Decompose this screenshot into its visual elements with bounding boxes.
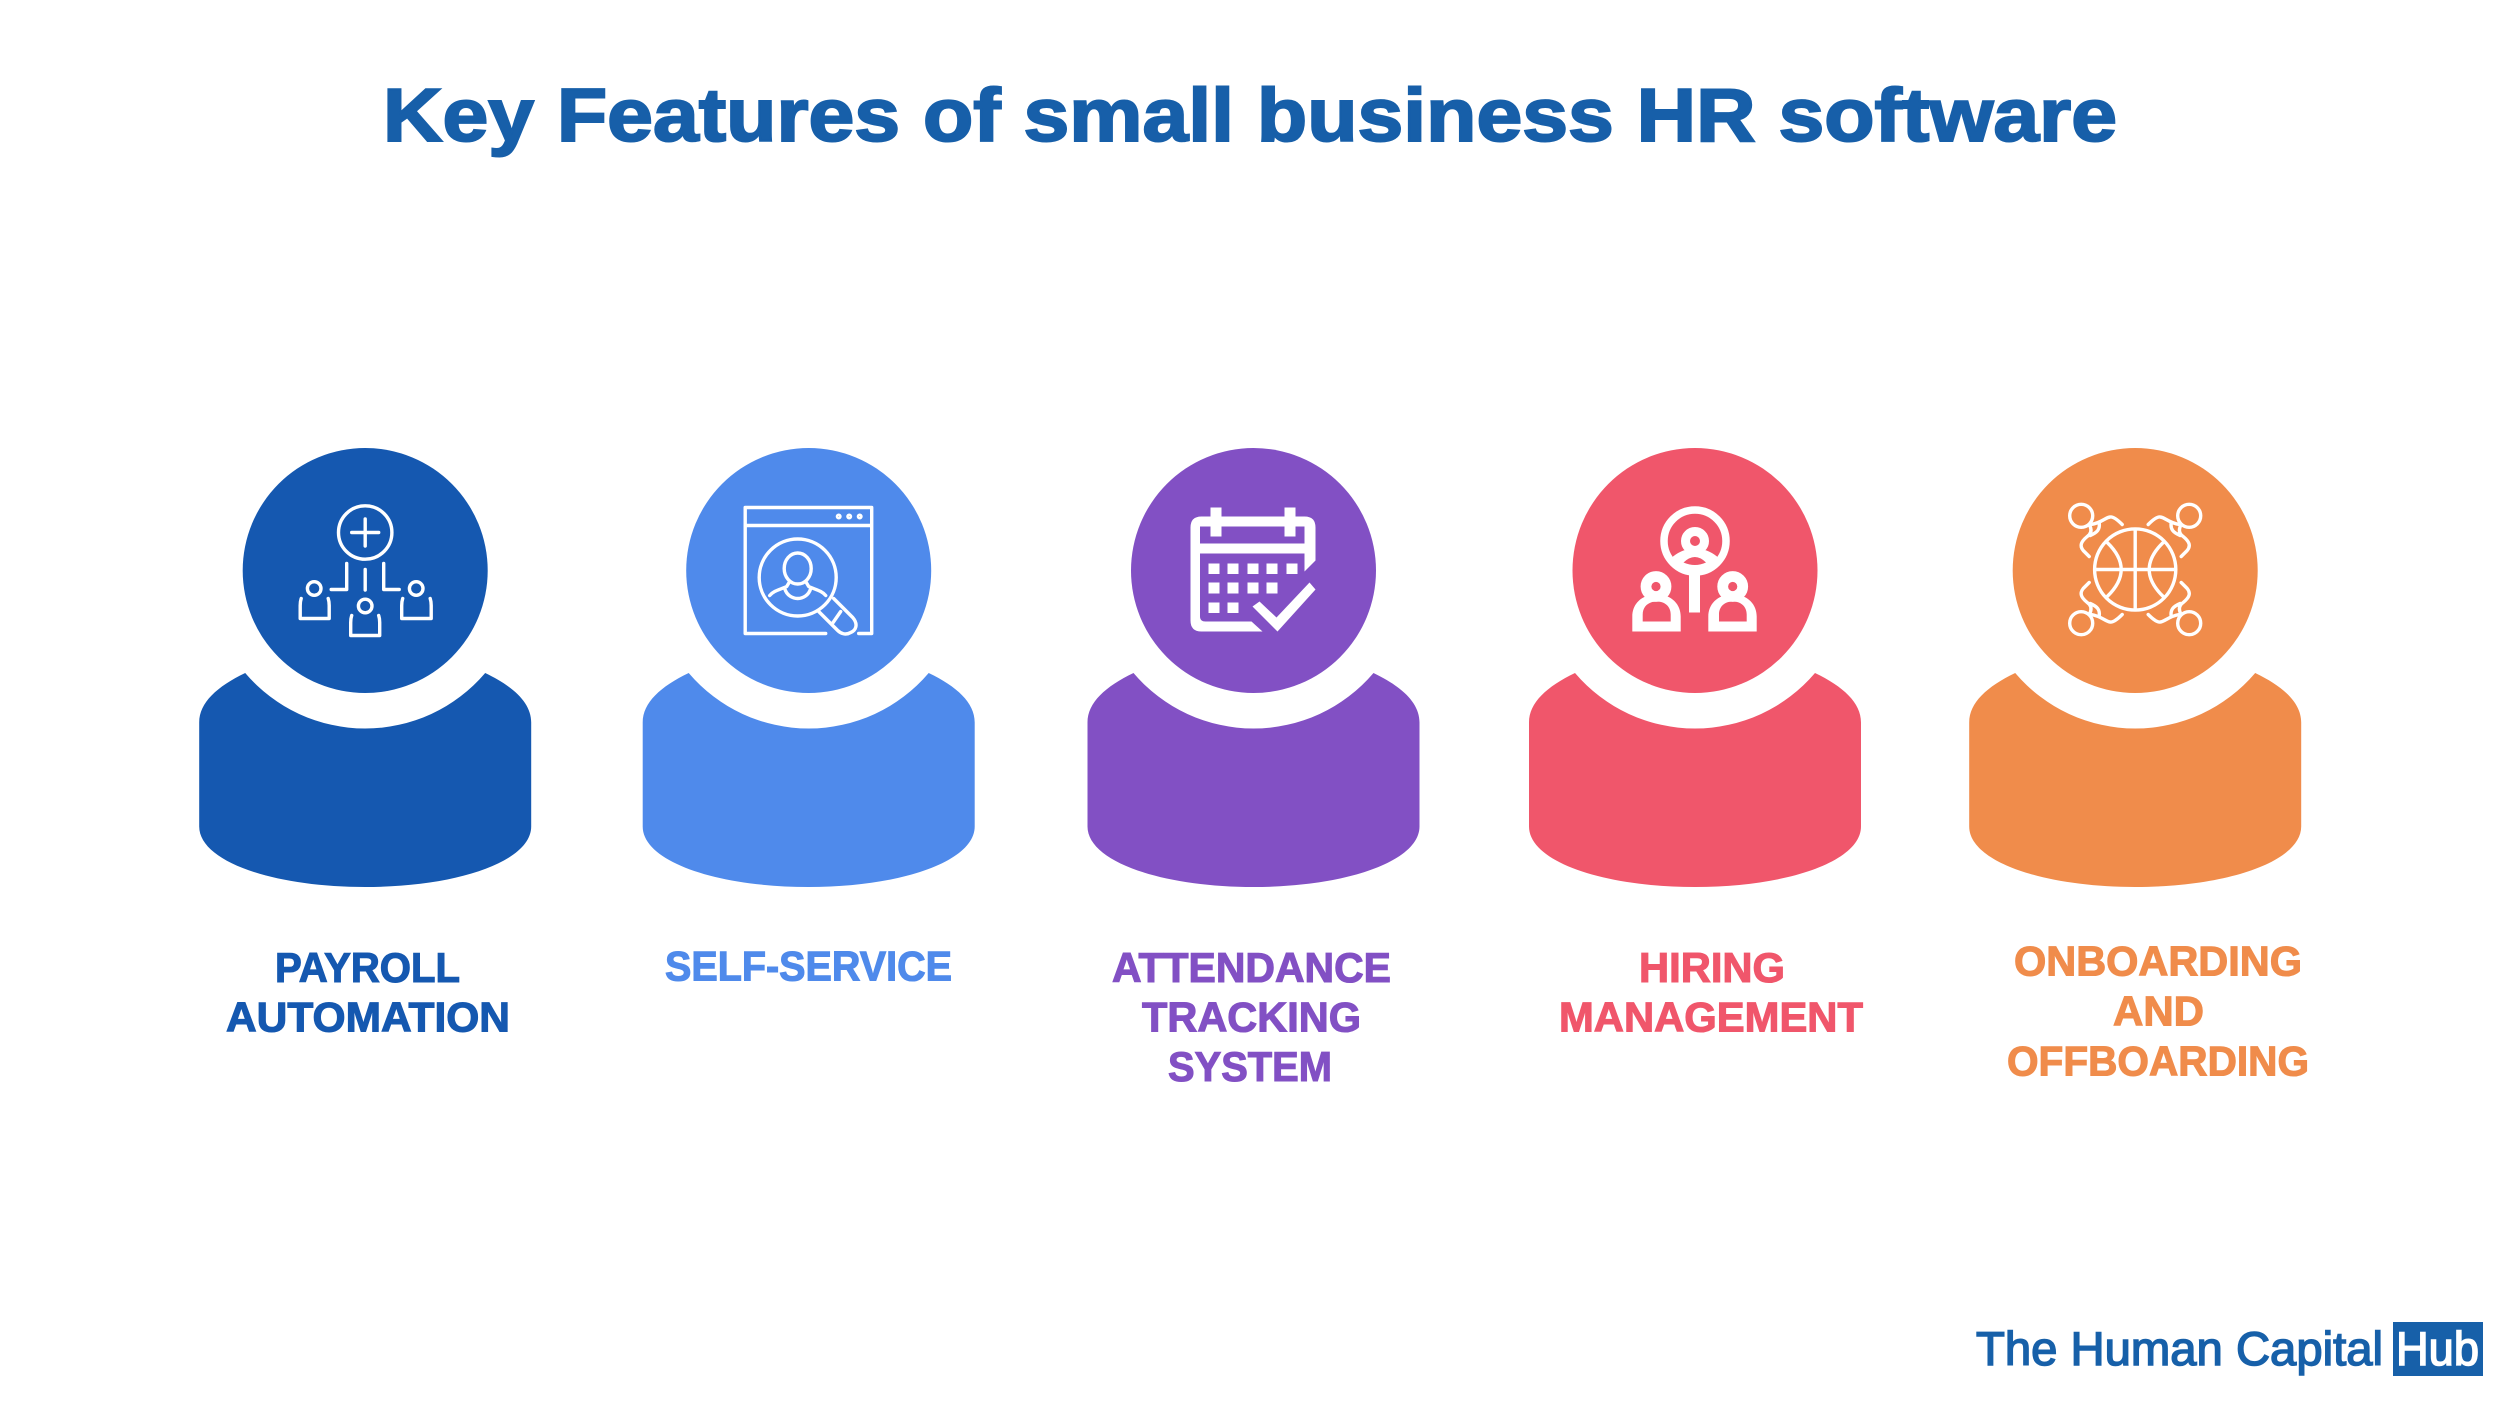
icon: org chart with plus	[300, 506, 431, 636]
label: payroll automation: PAYROLL	[275, 944, 460, 991]
label: attendance tracking system	[1112, 944, 1391, 1090]
label: attendance tracking system: ATTENDANCE	[1112, 944, 1391, 991]
label: attendance tracking system: SYSTEM	[1168, 1043, 1332, 1090]
body: payroll	[199, 673, 531, 887]
label: hiring management: MANAGEMENT	[1559, 994, 1863, 1040]
head circle: self-service	[686, 448, 931, 693]
head circle: payroll	[243, 448, 488, 693]
logo badge text: Hub	[2396, 1322, 2479, 1375]
body: attendance	[1088, 673, 1420, 887]
label: self-service: SELF-SERVICE	[665, 942, 952, 990]
label: payroll automation: AUTOMATION	[226, 994, 510, 1040]
figure: self-service person shape	[643, 448, 975, 887]
body: hiring	[1529, 673, 1861, 887]
panel: payroll automation	[199, 448, 531, 1040]
head circle: onboarding	[2013, 448, 2258, 693]
figure: attendance person shape	[1088, 448, 1420, 887]
label: payroll automation	[226, 944, 510, 1040]
panel: self-service	[643, 448, 975, 990]
icon: calendar with check	[1190, 508, 1316, 632]
body: onboarding	[1969, 673, 2301, 887]
figure: onboarding person shape	[1969, 448, 2301, 887]
logo: The Human Capital Hub	[1976, 1322, 2483, 1376]
icon: target candidate and two people	[1632, 510, 1757, 632]
logo text: The Human Capital	[1976, 1322, 2383, 1375]
label: onboarding and offboarding: ONBOARDING	[2014, 938, 2302, 984]
label: hiring management	[1559, 944, 1863, 1040]
figure: payroll person shape	[199, 448, 531, 887]
head circle: attendance	[1131, 448, 1376, 693]
icon: basketball with four connected nodes	[2070, 504, 2201, 635]
label: onboarding and offboarding	[2007, 938, 2309, 1084]
label: onboarding and offboarding: AND	[2113, 988, 2204, 1034]
label: hiring management: HIRING	[1639, 944, 1785, 991]
icon: window with magnifier on user	[745, 508, 872, 634]
figure: hiring person shape	[1529, 448, 1861, 887]
body: self-service	[643, 673, 975, 887]
panel: hiring management	[1529, 448, 1863, 1040]
head circle: hiring	[1572, 448, 1818, 693]
label: onboarding and offboarding: OFFBOARDING	[2007, 1038, 2309, 1084]
panel: attendance tracking system	[1088, 448, 1420, 1090]
title: Key Features of small business HR software	[383, 73, 2117, 157]
label: attendance tracking system: TRACKING	[1142, 994, 1361, 1040]
panel: onboarding and offboarding	[1969, 448, 2309, 1084]
logo badge	[2393, 1322, 2483, 1376]
